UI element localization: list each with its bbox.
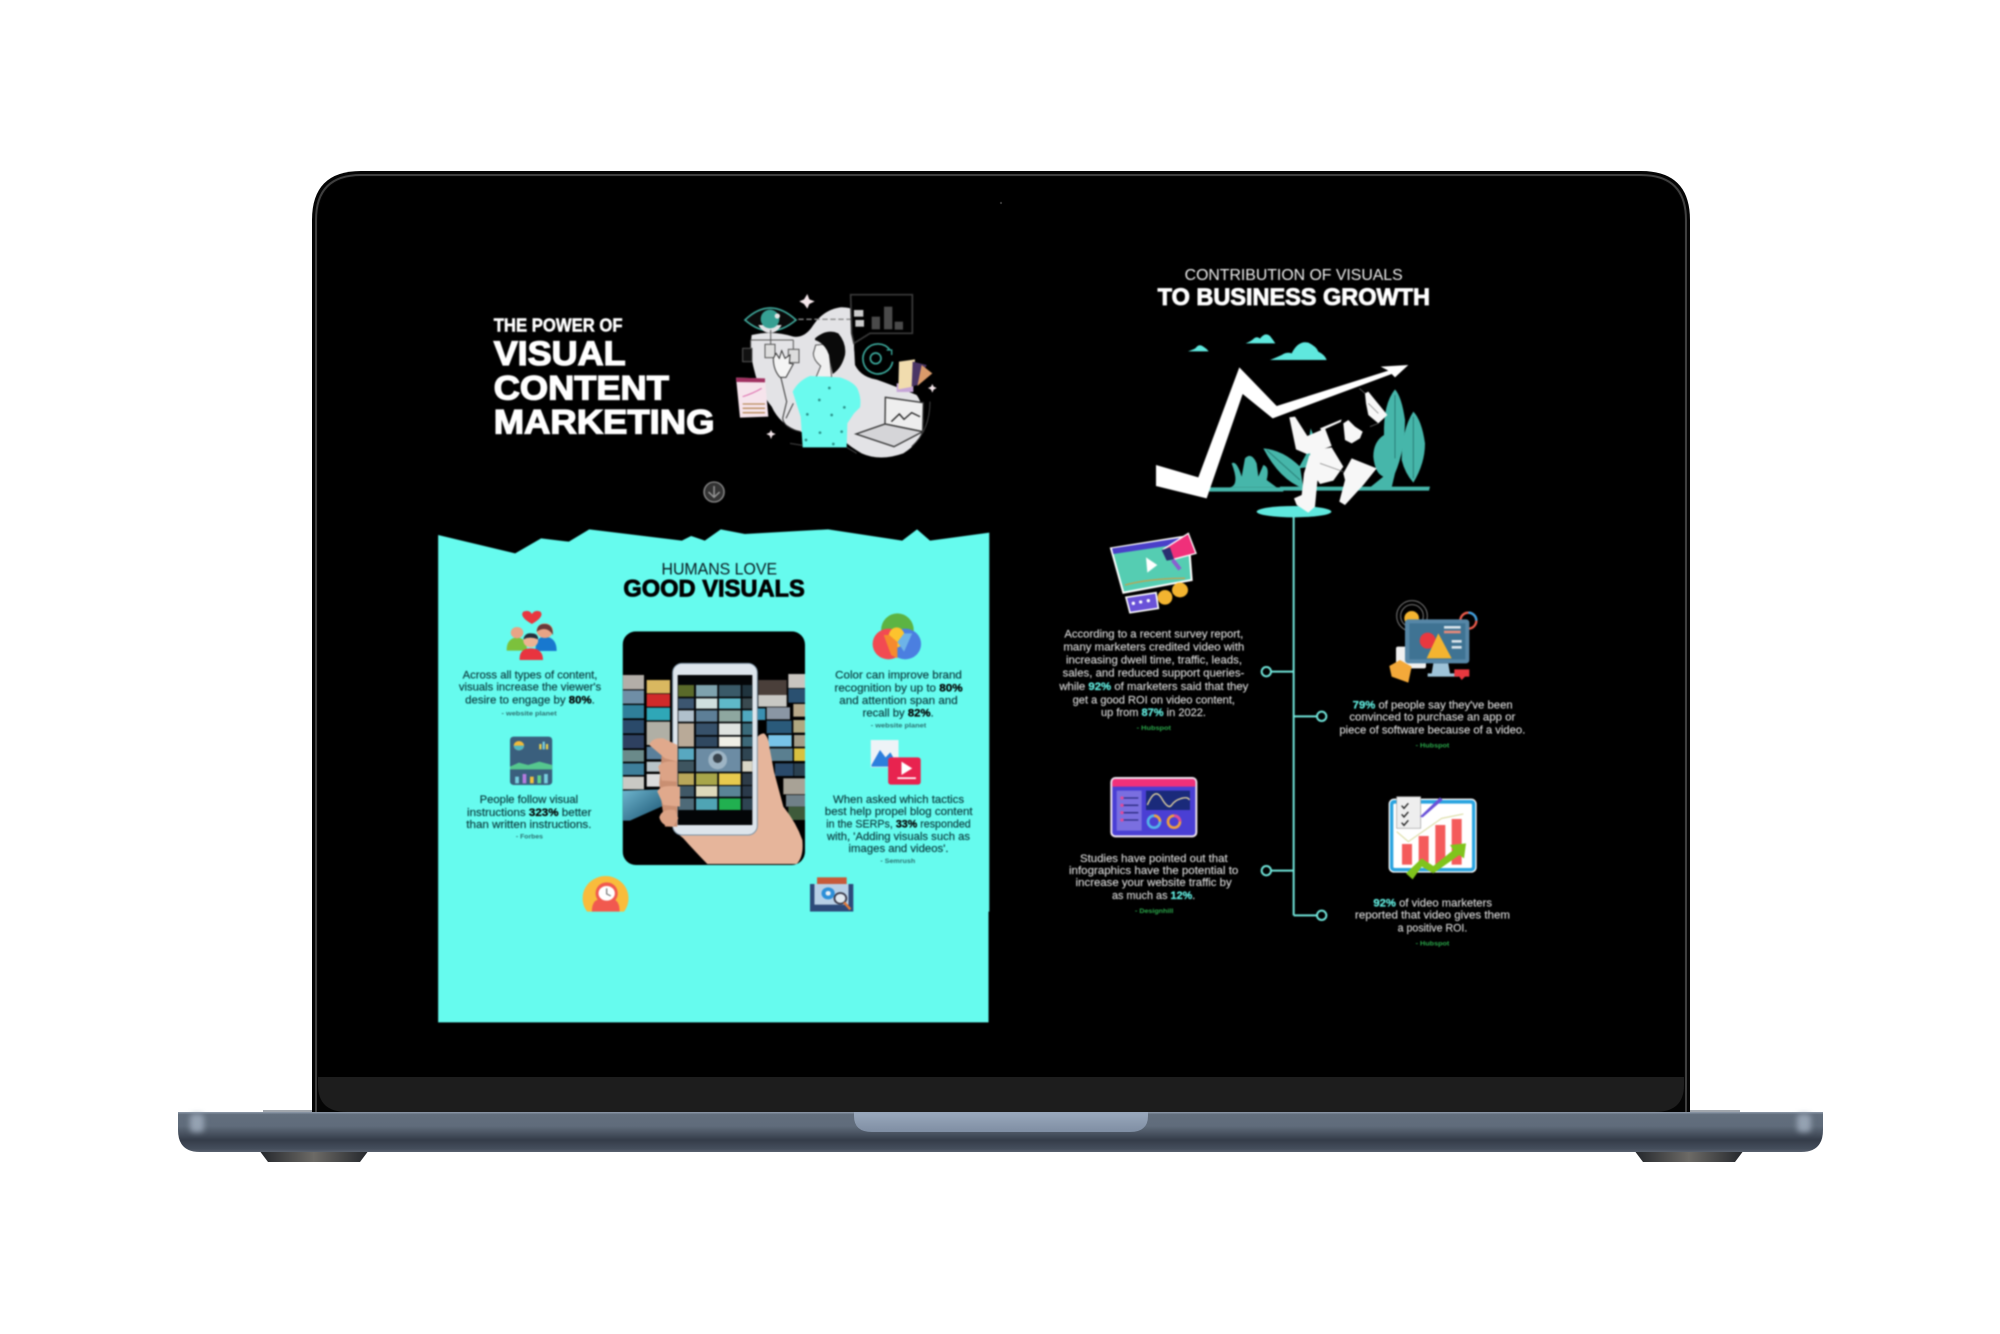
text: blog content tactics: in the SERPs, 33% responded [826,818,971,831]
tall plants and ground [1280,389,1430,491]
sparkles [766,294,937,439]
text: engage by 80%: Across all types of content, [463,669,597,682]
illustration: marketer with visuals [736,294,937,457]
panel: contribution of visuals to business growth [1156,267,1430,517]
text: video marketers ROI stat: 92% of video marketers [1373,898,1493,910]
text: engage by 80%: desire to engage by 80%. [465,694,595,707]
growth arrow [1156,365,1408,498]
icon: analytics dashboard [1111,778,1196,836]
text: video marketers ROI stat: a positive ROI. [1398,923,1467,935]
title: CONTENT [494,368,669,407]
text: app purchase stat: 79% of people say they've been [1353,700,1513,712]
refresh icon [863,344,893,374]
hand [773,351,793,377]
fingers [649,738,680,827]
chart card [851,295,912,343]
shirt [793,376,860,447]
base right highlight [1797,1114,1811,1132]
flow chart boxes [743,330,799,363]
text: blog content tactics [825,794,973,865]
text: infographics stat: as much as 12%. [1112,890,1195,902]
text: video ROI stat [1058,628,1249,732]
hair [815,332,845,374]
text: video ROI stat: many marketers credited video with [1063,641,1244,653]
outline swooshes [790,402,930,453]
text: infographics stat: infographics have the potential to [1069,865,1238,877]
arm outline [781,377,801,432]
panel: timeline with statistics [1058,517,1525,947]
text: app purchase stat [1339,700,1525,749]
leaf veins [1395,395,1413,478]
text: blog content tactics: When asked which tactics [833,794,964,806]
panel: header illustration and title [494,294,937,502]
text: visual instructions: - Forbes [516,834,543,841]
text: blog content tactics: images and videos'. [849,843,949,855]
icon: rising bar chart [1389,797,1476,879]
text: video ROI stat: sales, and reduced support queries- [1063,668,1245,680]
title: MARKETING [494,402,714,441]
text: infographics stat [1069,853,1238,915]
cyan torn-edge background [438,529,989,1022]
report card [736,378,768,418]
photo: hand holding smartphone [623,631,805,865]
panel: humans love good visuals [438,529,989,1022]
heading: CONTRIBUTION OF VISUALS [1185,267,1403,284]
infographic on screen [438,267,1525,1022]
text: video marketers ROI stat: - Hubspot [1416,941,1449,947]
clouds [1188,334,1327,360]
palm and thumb [673,733,803,864]
timeline start ellipse [1257,506,1331,517]
title: VISUAL [494,334,626,373]
text: app purchase stat: piece of software because of a video. [1339,725,1525,737]
text: visual instructions: than written instructions. [466,819,591,831]
timeline trunk and branches [1262,517,1326,920]
camera dot [1000,202,1002,204]
heading: TO BUSINESS GROWTH [1158,284,1430,311]
text: engage by 80%: - website planet [501,711,558,717]
blob [751,307,924,457]
text: infographics stat: Studies have pointed out that [1080,853,1228,865]
text: video ROI stat: - Hubspot [1137,726,1171,732]
text: brand recognition: recognition by up to 80% [834,682,963,695]
icon: people with heart [507,611,557,660]
text: video marketers ROI stat [1355,898,1510,947]
laptop lid [312,171,1690,1114]
laptop mockup with infographic [178,171,1823,1162]
text: brand recognition: recall by 82%. [863,707,934,720]
icon: image and video [871,740,921,785]
left video wall [623,675,670,821]
eye icon [745,308,796,333]
heading: HUMANS LOVE [661,559,777,578]
illustration: runner and plants [1280,388,1430,513]
text: brand recognition: Color can improve brand [835,669,962,682]
icon: overlapping colour circles [873,613,921,659]
text: brand recognition: and attention span and [839,695,958,707]
text: visual instructions: instructions 323% better [467,807,592,819]
text: blog content tactics: - Semrush [880,858,915,865]
screen chin [318,1077,1684,1112]
laptop feet [259,1150,1744,1162]
text: infographics stat: increase your website traffic by [1076,877,1232,889]
color swatches [897,359,932,392]
neck and face [813,344,832,377]
phone screen thumbnails [678,685,752,810]
text: brand recognition: - website planet [871,723,927,730]
text: brand recognition [834,669,963,730]
black notch behind refresh icon [854,335,898,380]
runner line details [1320,388,1378,472]
text: video ROI stat: According to a recent survey report, [1064,628,1243,640]
runner figure [1289,392,1387,513]
text: engage by 80% [459,669,601,717]
text: blog content tactics: best help propel blog content [825,806,973,818]
text: video ROI stat: while 92% of marketers said that they [1058,681,1249,693]
title [494,316,714,441]
text: video ROI stat: get a good ROI on video content, [1073,694,1235,706]
scroll down icon [704,482,724,502]
icon: video marketing [1111,533,1196,613]
icon: clock head (clipped) [582,875,630,913]
shirt pattern [805,387,846,445]
panel contents [459,559,973,921]
icon: dashboard [510,737,552,785]
left plants [1209,448,1303,492]
laptop sketch [856,397,923,447]
icon: settings monitor (clipped) [810,877,853,912]
text: video ROI stat: up from 87% in 2022. [1101,707,1206,719]
text: infographics stat: - Designhill [1135,909,1174,915]
text: video marketers ROI stat: reported that video gives them [1355,910,1510,922]
phone [673,663,757,835]
text: app purchase stat: convinced to purchase an app or [1349,712,1516,724]
text: visual instructions: People follow visual [480,794,578,806]
heading: GOOD VISUALS [623,576,805,602]
trackpad notch [854,1112,1148,1132]
icon: software monitor [1389,601,1476,683]
text: video ROI stat: increasing dwell time, traffic, leads, [1066,655,1242,667]
leaf vein [1267,450,1300,480]
right video wall [757,674,805,820]
laptop base [178,1112,1823,1152]
text: blog content tactics: with, 'Adding visuals such as [826,831,970,843]
text: app purchase stat: - Hubspot [1416,743,1449,749]
heading [623,559,805,602]
title: THE POWER OF [494,316,623,336]
hinge strips [263,1110,1740,1113]
heading [1158,267,1430,311]
dashed connector [798,317,852,321]
base left highlight [190,1114,204,1132]
text: engage by 80%: visuals increase the viewer's [459,681,601,694]
text: visual instructions [466,794,592,841]
